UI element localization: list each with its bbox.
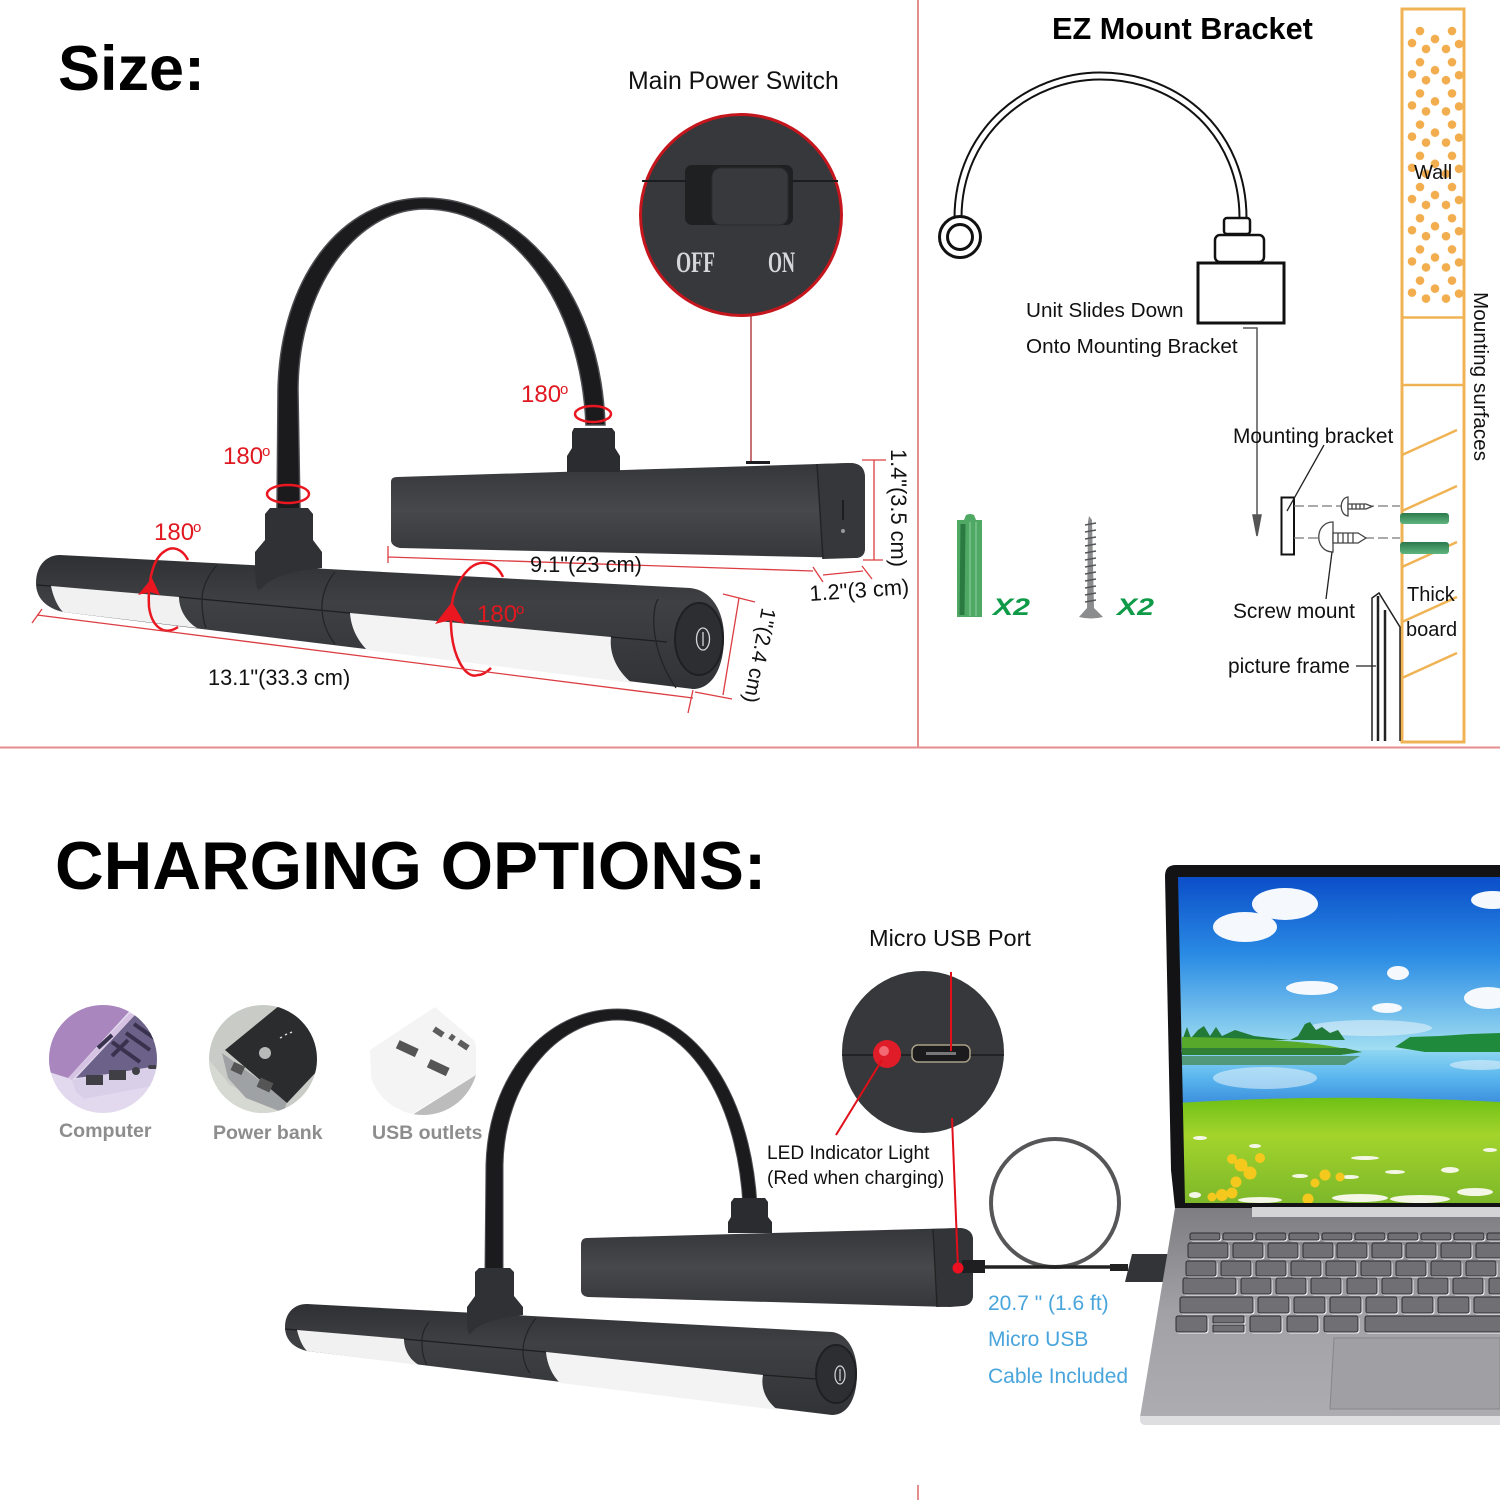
- lamp: rear mount bar: [391, 461, 865, 559]
- lamp: left light window: [51, 586, 197, 628]
- white wildflowers: [1189, 1136, 1497, 1203]
- lamp 2: end cap: [816, 1345, 856, 1403]
- picture frame section: [1372, 593, 1400, 741]
- icon label: computer: Computer: [59, 1120, 152, 1142]
- lamp: rear neck: [567, 428, 620, 472]
- anchors in wall: [1400, 513, 1449, 554]
- callout: power switch closeup: OFF: [676, 246, 715, 279]
- LED indicator dot: [952, 1262, 964, 1274]
- rotation labels: o: [262, 443, 270, 460]
- haze and reflections: [1213, 1020, 1500, 1089]
- rotation labels: o: [193, 519, 201, 536]
- panel: charging options: [49, 829, 1500, 1425]
- laptop: [1125, 865, 1500, 1425]
- diagram labels: [1228, 425, 1457, 678]
- diagram: gooseneck arm outline: [940, 76, 1243, 258]
- part count: screws: X2: [1114, 594, 1155, 621]
- rotation labels: 180: [154, 519, 194, 546]
- lamp 2: rear neck: [728, 1198, 772, 1233]
- lamp 2: front tube: [285, 1304, 857, 1415]
- label: cable: [988, 1292, 1128, 1388]
- lamp 2: gooseneck arm: [485, 1009, 757, 1270]
- dimension labels: 13.1"(33.3 cm): [208, 665, 350, 690]
- heading: charging options: CHARGING OPTIONS:: [55, 829, 766, 904]
- icon: computer: [49, 1005, 157, 1113]
- laptop: hinge: [1252, 1207, 1500, 1217]
- diagram labels: Mounting bracket: [1233, 425, 1393, 448]
- callout: power switch closeup: ON: [768, 246, 795, 279]
- label: mounting surfaces: Mounting surfaces: [1469, 292, 1492, 461]
- lamp 2: right light window: [546, 1352, 778, 1410]
- laptop: keyboard: [1176, 1233, 1500, 1332]
- label: cable: 20.7 " (1.6 ft): [988, 1292, 1109, 1315]
- lamp 2: left light window: [297, 1330, 419, 1365]
- icon label: power bank: Power bank: [213, 1122, 323, 1144]
- rotation labels: o: [560, 381, 568, 398]
- right island: [1395, 1033, 1500, 1052]
- bracket side view: [1282, 498, 1294, 554]
- lamp: front T-joint: [255, 508, 322, 590]
- dimension labels: 1.4"(3.5 cm): [886, 449, 911, 567]
- left island: [1182, 1022, 1362, 1065]
- wall cross section: [1402, 9, 1466, 742]
- label: wall: Wall: [1414, 162, 1452, 184]
- arrow: slide down: [1243, 328, 1261, 536]
- rotation labels: o: [516, 601, 524, 618]
- leader lines: USB port and LED: [836, 972, 958, 1268]
- lamp: gooseneck arm: [277, 198, 605, 510]
- USB plug: [1125, 1254, 1175, 1282]
- rotation markers: [149, 406, 611, 676]
- lamp 2: T-joint: [467, 1268, 523, 1334]
- rotation labels: 180: [477, 601, 517, 628]
- meadow: [1178, 1098, 1500, 1205]
- dimension labels: 1.2"(3 cm): [809, 574, 910, 606]
- label: cable: Cable Included: [988, 1365, 1128, 1388]
- callout: power switch closeup: [640, 114, 842, 316]
- label: LED indicator light: (Red when charging): [767, 1168, 944, 1189]
- laptop: front lip: [1140, 1416, 1500, 1425]
- icon: power bank: [209, 1005, 320, 1113]
- diagram labels: picture frame: [1228, 655, 1350, 678]
- dimension lines: [32, 460, 886, 713]
- panel: size: [32, 34, 911, 713]
- diagram labels: board: [1406, 619, 1457, 641]
- laptop: base deck: [1140, 1208, 1500, 1417]
- label: main power switch: Main Power Switch: [628, 68, 839, 95]
- heading: size: Size:: [58, 34, 205, 104]
- clouds: [1213, 888, 1500, 1013]
- part: green wall anchor: [957, 514, 982, 617]
- diagram labels: Thick: [1407, 584, 1456, 606]
- icon label: USB outlets: USB outlets: [372, 1122, 483, 1144]
- instruction text: Unit Slides Down: [1026, 299, 1184, 322]
- dimension labels: 9.1"(23 cm): [530, 552, 642, 577]
- panel: EZ mount bracket: [940, 9, 1492, 742]
- callout: USB port closeup: [842, 971, 1004, 1133]
- USB cable: [962, 1139, 1128, 1273]
- rotation labels: 180: [521, 381, 561, 408]
- part: screw: [1079, 516, 1103, 618]
- yellow flowers: [1208, 1153, 1344, 1204]
- lamp: end cap: [675, 603, 723, 675]
- dimension labels: 1"(2.4 cm): [739, 606, 780, 705]
- label: LED indicator light: [767, 1143, 944, 1189]
- lamp: right light window: [350, 613, 632, 683]
- lamp: front tube: [36, 555, 724, 689]
- rotation arrowheads: [138, 578, 465, 624]
- diagram: mount block: [1198, 218, 1284, 323]
- dimension labels: [208, 449, 911, 705]
- small screw: [1341, 497, 1372, 516]
- screw guide lines: [1294, 506, 1400, 538]
- lamp 2: rear mount bar: [581, 1228, 973, 1307]
- label: LED indicator light: LED Indicator Light: [767, 1143, 930, 1164]
- leader lines: [1287, 445, 1376, 666]
- diagram labels: Screw mount: [1233, 600, 1355, 623]
- leader line from switch to lamp: [750, 316, 752, 463]
- laptop: lid and bezel: [1165, 865, 1500, 1208]
- rotation labels: 180: [223, 443, 263, 470]
- instruction text: Onto Mounting Bracket: [1026, 335, 1238, 358]
- label: cable: Micro USB: [988, 1328, 1088, 1351]
- heading: EZ mount bracket: EZ Mount Bracket: [1052, 11, 1313, 46]
- label: micro USB port: Micro USB Port: [869, 925, 1031, 951]
- rotation labels: [154, 381, 568, 628]
- instruction text: [1026, 299, 1238, 358]
- laptop: screen wallpaper: [1178, 877, 1500, 1205]
- part count: anchors: X2: [990, 594, 1031, 621]
- large screw: [1319, 522, 1366, 552]
- laptop: trackpad: [1330, 1338, 1500, 1409]
- icon: USB outlets: [368, 1005, 478, 1115]
